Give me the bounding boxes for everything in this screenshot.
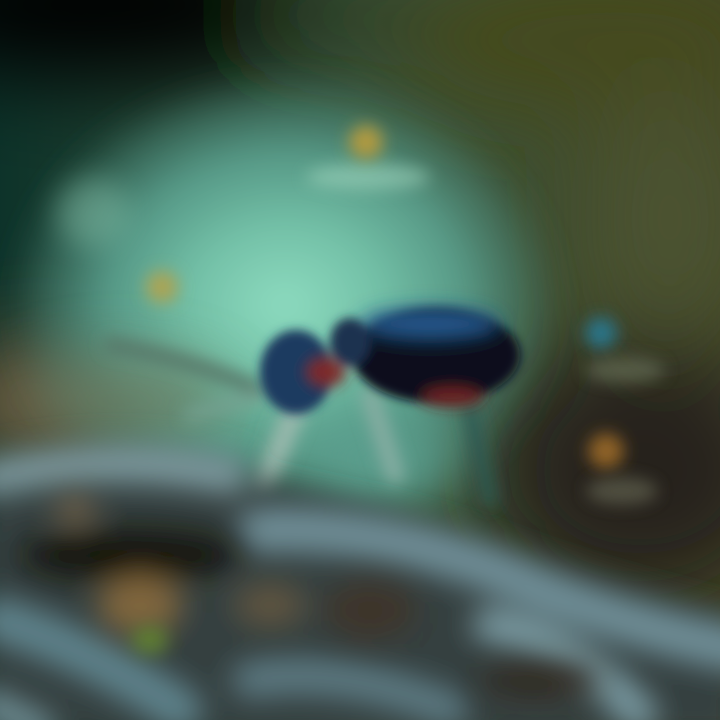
background: mint glow xyxy=(5,70,565,540)
abdomen red underside xyxy=(420,385,484,407)
icon: top amber dot xyxy=(349,125,383,159)
ground: brown debris xyxy=(20,496,600,698)
beetle xyxy=(260,307,520,414)
icon: right blue dot xyxy=(585,317,617,349)
glow: lower mint patch xyxy=(300,415,460,505)
ground xyxy=(0,463,720,720)
beetle neck xyxy=(330,318,370,366)
antennae xyxy=(110,345,262,415)
left text placeholder: faint blur xyxy=(56,178,128,246)
right text placeholder: lower xyxy=(586,477,658,505)
beetle legs xyxy=(262,395,490,500)
top heading placeholder: faint blur xyxy=(306,164,430,190)
left side haze xyxy=(10,355,230,445)
icon: right orange dot xyxy=(588,433,624,469)
beetle red eye xyxy=(306,357,346,387)
right text placeholder: upper xyxy=(585,357,665,383)
abdomen blue sheen xyxy=(360,308,500,340)
ground: green leaf fleck xyxy=(132,626,168,654)
icon: left amber dot xyxy=(146,271,178,303)
ground: rock highlights xyxy=(0,463,720,720)
beetle head xyxy=(260,330,332,414)
ground: rock base xyxy=(0,467,720,720)
beetle abdomen xyxy=(352,307,520,403)
